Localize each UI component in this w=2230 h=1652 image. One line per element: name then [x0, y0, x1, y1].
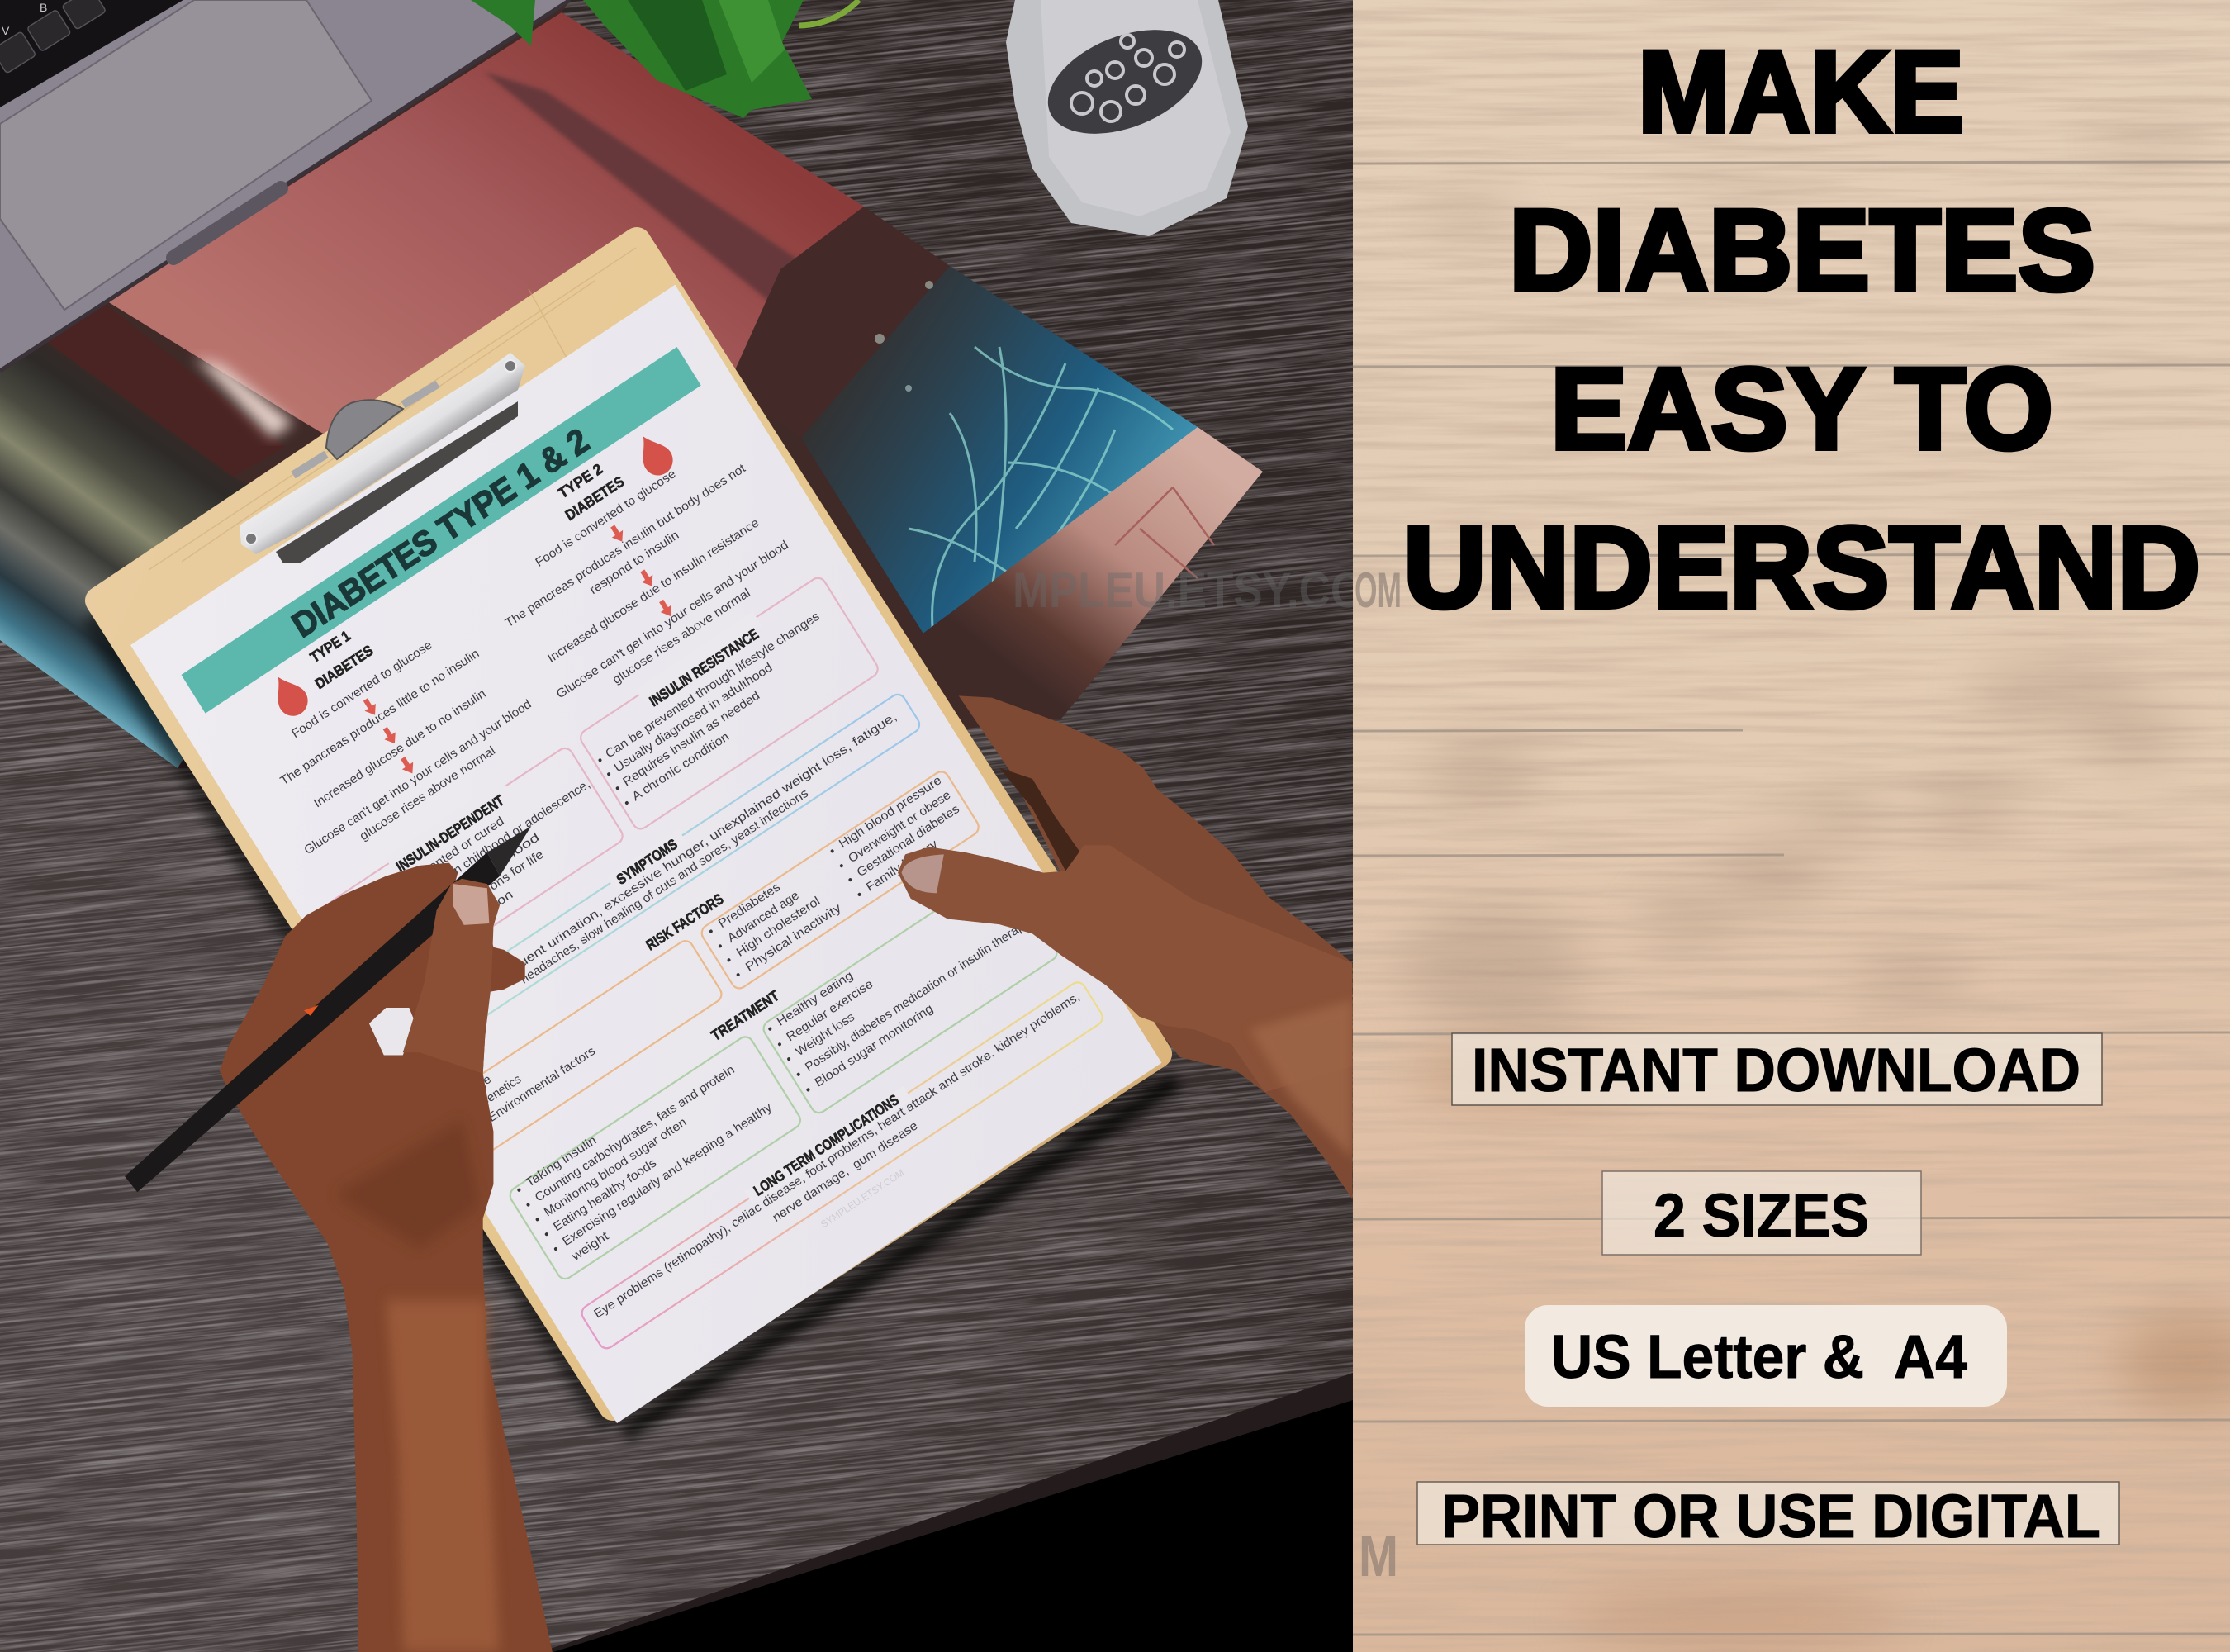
thumb — [403, 879, 500, 1074]
type 2 treatment box: Healthy eating — [775, 968, 856, 1029]
type 1 treatment box: Taking insulin — [524, 1133, 599, 1190]
metal clip — [240, 353, 525, 563]
watermark on wood — [1355, 563, 1402, 1588]
title banner: DIABETES TYPE 1 & 2 — [285, 420, 595, 645]
panel: insulin resistance: A chronic condition — [629, 729, 732, 804]
type 1 flow text: glucose rises above normal — [358, 743, 498, 843]
icon: blood drop type 1 — [266, 669, 313, 722]
panel: insulin-dependent — [323, 739, 625, 998]
panel: symptoms: Blurred vision, frequent urination, excessive hunger, unexplained weight loss, fatigue, — [410, 710, 899, 1041]
panel: insulin resistance: Usually diagnosed in adulthood — [612, 660, 775, 776]
right wrist highlight — [1250, 1000, 1352, 1159]
type 1 flow text: The pancreas produces little to no insulin — [278, 646, 482, 788]
panel: insulin resistance: Requires insulin as needed — [620, 688, 762, 789]
arm highlight — [386, 1300, 500, 1652]
type 1 treatment box: Eating healthy foods — [551, 1156, 659, 1234]
type 2 column — [460, 393, 805, 721]
watermark on wood: M — [1359, 1524, 1398, 1588]
type 2 flow text — [485, 432, 805, 721]
risk factors heading: RISK FACTORS — [643, 890, 726, 954]
panel: wood background — [1353, 0, 2230, 1652]
main headline: DIABETES — [1509, 185, 2095, 315]
panel: symptoms: SYMPTOMS — [614, 836, 681, 888]
type 2 treatment box — [761, 865, 1060, 1116]
type 1 heading — [299, 621, 376, 692]
panel: insulin-dependent: but can occur in adulthood — [367, 830, 542, 953]
type 1 heading: TYPE 1 — [307, 627, 353, 666]
icon: blood drop type 2 — [631, 429, 678, 482]
clip springs — [293, 384, 438, 475]
panel: symptoms — [396, 685, 923, 1058]
badge: instant download: INSTANT DOWNLOAD — [1472, 1036, 2081, 1104]
wood plank lines — [1353, 162, 2230, 1635]
type 1 treatment box: weight — [568, 1228, 612, 1265]
paper shadow — [619, 1072, 1181, 1441]
type 2 flow text: Increased glucose due to insulin resistance — [545, 515, 762, 666]
right hand palm and thumb — [898, 845, 1352, 1159]
desk surface — [0, 0, 1353, 1652]
panel: insulin-dependent: Autoimmune condition — [384, 887, 515, 981]
magazine blue marble image — [801, 266, 1198, 671]
keyboard: V — [2, 24, 10, 37]
type 1 flow text: Increased glucose due to no insulin — [311, 686, 488, 810]
water glass — [1006, 0, 1248, 236]
badge: 2 sizes — [1602, 1171, 1921, 1255]
badge: us letter and a4 — [1525, 1305, 2007, 1407]
type 1 column — [218, 563, 544, 874]
keyboard: B — [40, 1, 47, 14]
clip lever — [326, 400, 403, 459]
type 2 heading: TYPE 2 — [555, 460, 605, 501]
thumb nail — [902, 854, 944, 893]
panel: treatment — [494, 843, 1060, 1284]
panel: insulin-dependent: Requires insulin injections for life — [375, 847, 546, 967]
type 2 heading: DIABETES — [562, 472, 627, 524]
treatment heading: TREATMENT — [709, 987, 782, 1044]
type 1 risk box — [447, 938, 724, 1156]
sheet of paper — [130, 285, 1161, 1423]
palm shadow — [335, 1121, 479, 1247]
type 2 risk box: Prediabetes — [716, 880, 783, 931]
type 1 treatment box: Counting carbohydrates, fats and protein — [533, 1062, 737, 1205]
sheet watermark: SYMPLEU.ETSY.COM — [818, 1166, 906, 1230]
clipboard — [81, 241, 1158, 1432]
type 2 risk box: Overweight or obese — [846, 788, 953, 866]
type 2 treatment box: Possibly, diabetes medication or insulin therapy — [803, 915, 1032, 1075]
watermark across photo: MPLEU.ETSY.COM — [1013, 563, 1401, 618]
panel: insulin-dependent: Usually diagnosed in childhood or adolescence, — [358, 777, 593, 939]
laptop notch — [173, 188, 281, 258]
type 1 flow text: Glucose can't get into your cells and your blood — [301, 697, 534, 857]
laptop — [0, 0, 570, 371]
type 2 flow arrows — [607, 521, 676, 621]
type 2 flow text: Food is converted to glucose — [533, 467, 678, 570]
type 1 treatment box: Monitoring blood sugar often — [542, 1115, 689, 1220]
magazine striped image — [0, 343, 247, 768]
type 2 treatment box: Regular exercise — [784, 977, 875, 1044]
wood knots and blotches — [1403, 131, 2230, 1652]
paper gap between fingers — [369, 1008, 415, 1055]
keyboard — [0, 0, 183, 107]
magazine — [0, 0, 1263, 768]
panel: insulin resistance: INSULIN RESISTANCE — [647, 625, 762, 710]
magazine red page — [109, 12, 864, 434]
type 2 flow text: glucose rises above normal — [610, 586, 752, 687]
type 1 flow text — [246, 609, 544, 874]
badge: us letter and a4: US Letter & A4 — [1551, 1322, 1967, 1391]
type 2 risk box: Gestational diabetes — [855, 802, 962, 880]
magazine pale page — [909, 427, 1263, 719]
water with pebbles — [1033, 9, 1217, 154]
type 2 flow text: The pancreas produces insulin but body does not — [503, 461, 748, 630]
type 1 risk box: Genetics — [477, 1072, 524, 1110]
type 2 treatment box: Blood sugar monitoring — [813, 1001, 936, 1090]
hand and arm — [220, 863, 553, 1652]
type 2 heading — [551, 454, 627, 524]
type 2 treatment box: Weight loss — [793, 1010, 857, 1059]
type 2 risk box: Physical inactivity — [743, 900, 844, 975]
type 2 risk box: High blood pressure — [837, 773, 944, 851]
type 2 flow text: respond to insulin — [587, 528, 681, 597]
type 1 risk box: Age — [467, 1072, 494, 1096]
panel: long term complications: LONG TERM COMPLICATIONS — [751, 1091, 902, 1199]
badge: 2 sizes: 2 SIZES — [1654, 1181, 1869, 1250]
panel: insulin resistance — [574, 569, 880, 832]
left hand holding pencil — [125, 826, 553, 1652]
type 2 risk box: High cholesterol — [734, 894, 823, 960]
right hand fingers behind clipboard — [959, 695, 1352, 1199]
type 2 risk box: Advanced age — [725, 888, 801, 946]
watermark on wood: OM — [1355, 563, 1402, 618]
panel: long term complications: nerve damage, gum disease — [770, 1118, 920, 1225]
badge: print or use digital: PRINT OR USE DIGITAL — [1441, 1482, 2100, 1550]
type 2 risk box: Family history — [864, 837, 941, 895]
type 1 treatment box: Exercising regularly and keeping a healthy — [560, 1100, 775, 1249]
main headline: MAKE — [1638, 26, 1964, 156]
photo scene — [0, 0, 1353, 1652]
panel: long term complications: Eye problems (retinopathy), celiac disease, foot problems, heart attack and stroke, kidney problems, — [591, 990, 1082, 1322]
diabetes handout sheet — [130, 285, 1161, 1423]
title banner — [181, 347, 701, 714]
panel: insulin-dependent: Cannot be prevented or cured — [349, 814, 506, 925]
main headline: EASY TO — [1550, 344, 2053, 473]
panel: symptoms: headaches, slow healing of cuts and sores, yeast infections — [518, 786, 811, 987]
panel: insulin resistance: Can be prevented through lifestyle changes — [603, 610, 822, 762]
pencil — [125, 826, 531, 1192]
type 1 flow arrows — [360, 695, 419, 777]
type 1 flow text: Food is converted to glucose — [289, 638, 434, 741]
panel: insulin-dependent: INSULIN-DEPENDENT — [393, 792, 507, 876]
main headline — [1403, 26, 2200, 632]
type 1 treatment box — [505, 1031, 804, 1282]
type 1 risk box: Environmental factors — [486, 1044, 598, 1125]
type 1 heading: DIABETES — [312, 642, 376, 692]
plant leaves — [471, 0, 859, 118]
type 2 risk box — [699, 768, 981, 991]
trackpad — [0, 0, 372, 310]
main headline: UNDERSTAND — [1403, 502, 2200, 632]
type 2 flow text: Glucose can't get into your cells and your blood — [554, 538, 791, 701]
panel: risk factors — [435, 749, 981, 1158]
